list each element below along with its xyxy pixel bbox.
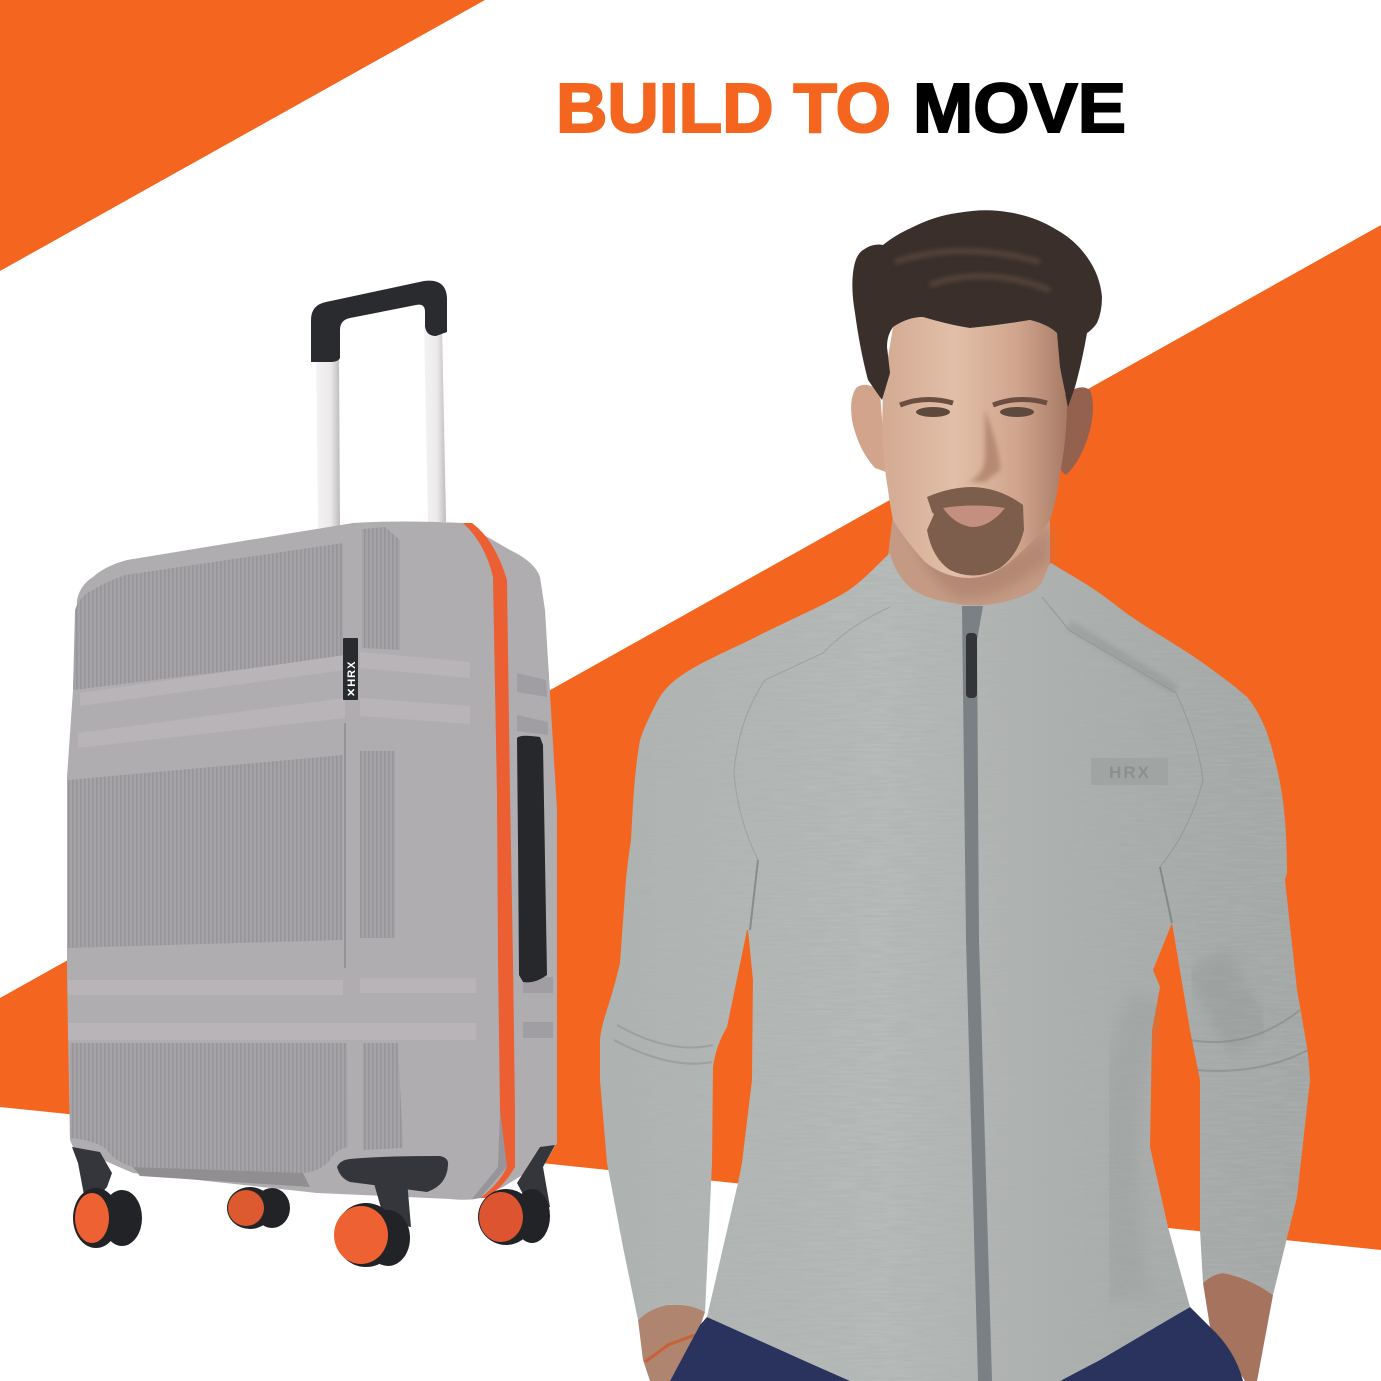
hair highlights <box>895 251 1050 290</box>
lower ribbed panel <box>70 1043 348 1173</box>
zipper pull <box>966 633 977 698</box>
seam next to zipper <box>463 523 507 1199</box>
eyebrows <box>900 399 1047 405</box>
left hand and wrist <box>638 1305 705 1381</box>
side panel grey stripes <box>517 673 553 1038</box>
jacket shading and seams <box>614 597 1308 1300</box>
chest logo: HRX <box>1109 763 1151 782</box>
wheel: right <box>478 1189 550 1245</box>
wheel: front center <box>334 1180 411 1267</box>
upper ribbed panel <box>73 543 343 690</box>
eyes <box>916 407 1034 417</box>
left ear <box>851 385 886 472</box>
chest logo <box>1091 758 1168 785</box>
brand tag HRX: ✕HRX <box>346 661 358 697</box>
title: black word: MOVE <box>913 69 1126 147</box>
lips <box>943 506 1005 527</box>
neck shadow under jaw <box>910 525 1050 598</box>
horizontal strap bands <box>68 652 476 1040</box>
title: orange words: BUILD TO <box>556 69 891 147</box>
title <box>556 69 1126 147</box>
bottom recess <box>133 1167 310 1187</box>
jacket silhouette with sleeves <box>600 553 1310 1381</box>
lower side ribs <box>363 1043 403 1150</box>
wheel: rear <box>227 1187 290 1229</box>
suitcase product <box>67 281 557 1267</box>
bottom wheel housings <box>72 1145 555 1213</box>
face <box>882 317 1067 578</box>
man in grey zip jacket <box>600 210 1310 1381</box>
background: orange triangle top left <box>0 0 485 271</box>
upper side ribs <box>362 527 400 650</box>
jacket zipper <box>962 606 992 1381</box>
background: orange diagonal band <box>0 225 1381 1250</box>
orange zipper <box>463 523 515 1198</box>
telescopic trolley handle <box>311 281 447 528</box>
vertical strap edge <box>344 723 346 968</box>
wheel: front left <box>73 1188 142 1248</box>
right hand and wrist <box>1203 1273 1273 1381</box>
goatee and moustache <box>927 487 1024 576</box>
right ear <box>1060 387 1093 475</box>
middle side ribs <box>360 751 395 938</box>
neck <box>888 515 1050 612</box>
brand tag HRX <box>343 638 358 700</box>
wrist thread bracelet <box>645 1335 695 1362</box>
side carry handle <box>517 736 547 982</box>
nose shadow <box>968 410 1000 482</box>
navy trousers <box>670 1307 1243 1381</box>
middle ribbed panel <box>68 755 343 948</box>
hair <box>852 210 1102 407</box>
suitcase shell silhouette <box>67 522 557 1200</box>
